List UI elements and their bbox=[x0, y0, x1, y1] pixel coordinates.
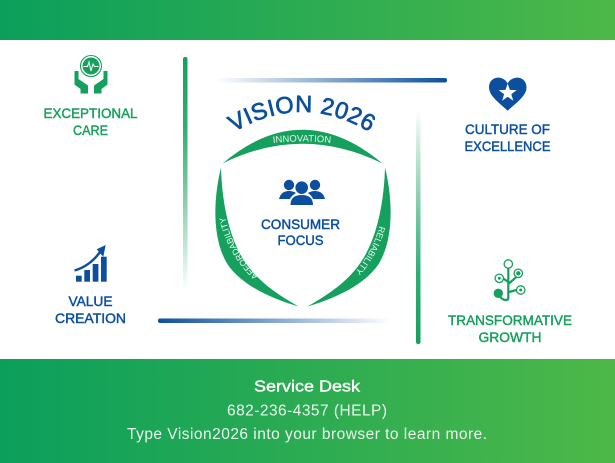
icon: growth tree bbox=[494, 260, 525, 300]
right vertical divider bbox=[416, 110, 420, 344]
bottom horizontal divider bbox=[158, 318, 391, 323]
label: consumer focus: FOCUS bbox=[278, 232, 324, 248]
label: exceptional care: CARE bbox=[73, 122, 108, 138]
icon: group of people bbox=[279, 180, 325, 205]
label: transformative growth: TRANSFORMATIVE bbox=[448, 312, 572, 328]
label: consumer focus: CONSUMER bbox=[261, 216, 340, 232]
shield right band: reliability: RELIABILITY bbox=[356, 226, 386, 276]
footer: service desk text: Service Desk bbox=[254, 378, 361, 396]
shield left band: affordability: AFFORDABILITY bbox=[219, 218, 258, 278]
label: culture of excellence bbox=[464, 121, 550, 154]
label: culture of excellence: CULTURE OF bbox=[465, 121, 550, 137]
title: vision 2026: VISION 2026 bbox=[226, 95, 376, 130]
footer: service desk text bbox=[127, 378, 487, 443]
footer: service desk text: 682-236-4357 (HELP) bbox=[227, 402, 387, 420]
left vertical divider bbox=[183, 57, 188, 290]
shield top band: innovation: INNOVATION bbox=[273, 134, 331, 143]
label: exceptional care bbox=[44, 105, 138, 138]
icon: rising bar chart bbox=[74, 245, 107, 282]
label: value creation bbox=[55, 293, 126, 326]
icon: heart with star bbox=[489, 78, 526, 111]
bottom green band bbox=[0, 359, 615, 463]
top green band bbox=[0, 0, 615, 40]
label: consumer focus bbox=[261, 216, 340, 248]
shield left band: affordability bbox=[215, 168, 298, 306]
shield emblem bbox=[215, 130, 391, 306]
label: transformative growth: GROWTH bbox=[478, 329, 542, 345]
shield top band: innovation bbox=[222, 130, 382, 164]
top horizontal divider bbox=[215, 78, 447, 82]
label: exceptional care: EXCEPTIONAL bbox=[44, 105, 138, 121]
label: value creation: VALUE bbox=[68, 293, 112, 309]
label: transformative growth bbox=[448, 312, 572, 345]
footer: service desk text: Type Vision2026 into your browser to learn more. bbox=[127, 426, 487, 443]
label: culture of excellence: EXCELLENCE bbox=[464, 138, 550, 154]
icon: hands holding heartbeat bbox=[74, 56, 108, 94]
shield right band: reliability bbox=[308, 168, 391, 306]
label: value creation: CREATION bbox=[55, 310, 126, 326]
